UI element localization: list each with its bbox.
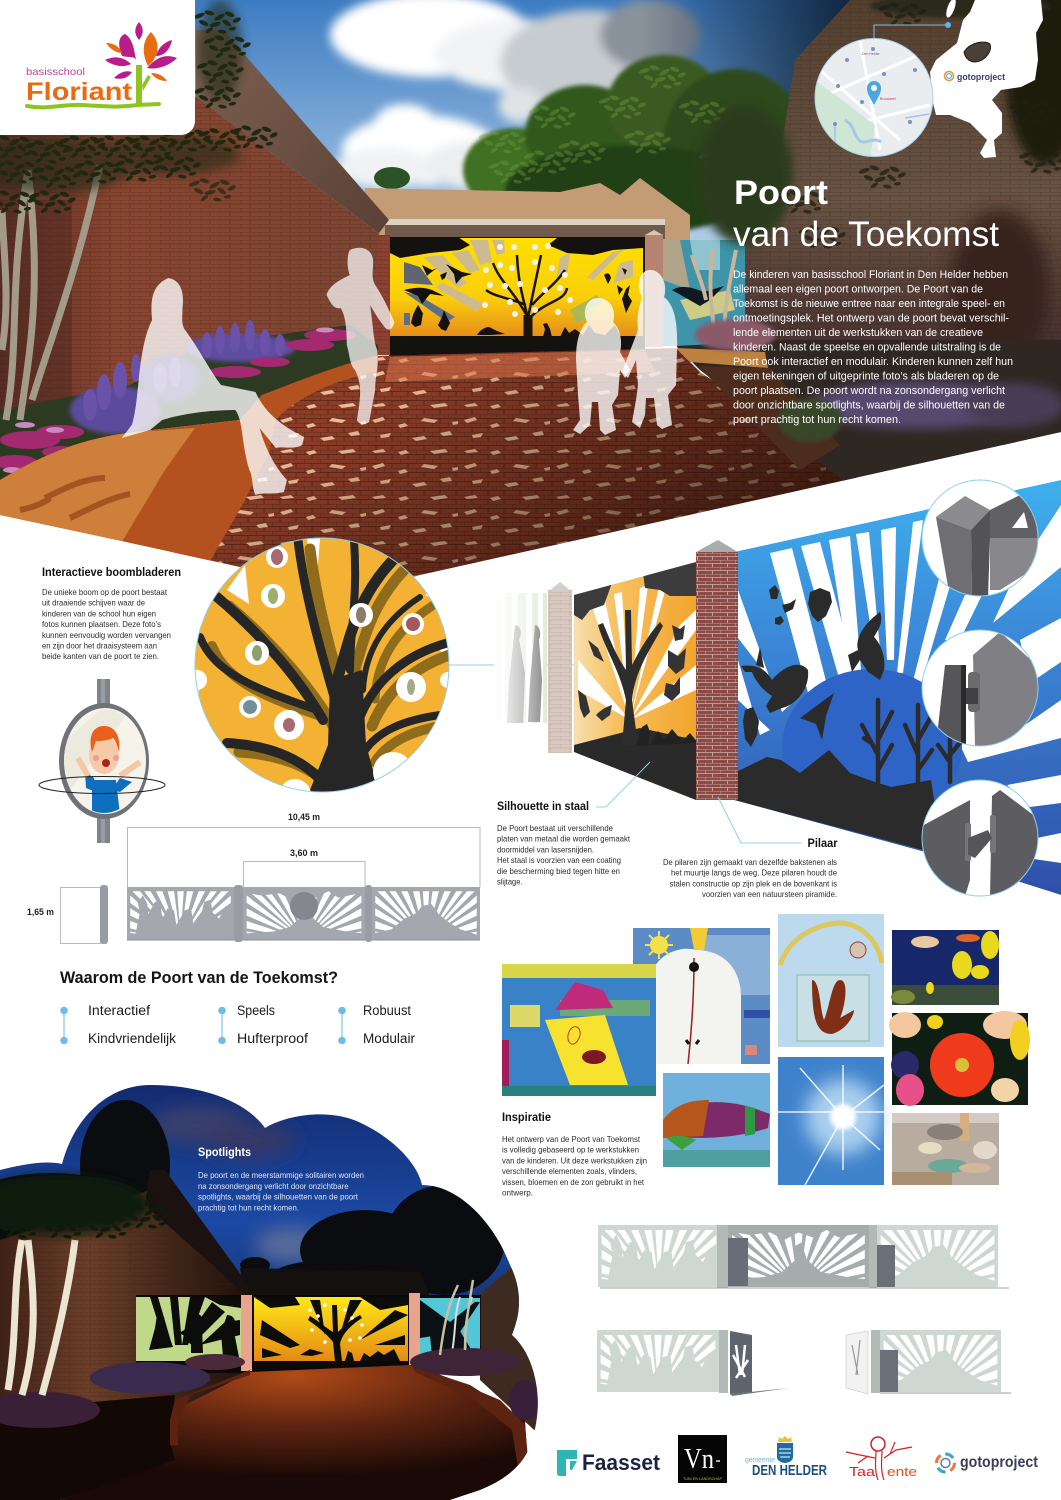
title: Poort — [734, 174, 828, 212]
text: Inspiratie: is volledig gebaseerd op te werkstukken — [502, 1145, 639, 1155]
bullet pair: Speels / Hufterproof: Speels — [237, 1003, 275, 1018]
far left faded gate panel — [494, 590, 550, 725]
logo: Faasset: Faasset — [582, 1450, 661, 1475]
roof eave — [196, 30, 389, 233]
text: Inspiratie: Het ontwerp van de Poort van Toekomst — [502, 1134, 641, 1144]
heading: Pilaar: Pilaar — [808, 838, 838, 850]
night right panel — [420, 1297, 480, 1360]
photo: sun in sky — [778, 1057, 884, 1185]
logo: gemeente Den Helder — [745, 1436, 827, 1479]
logo: gemeente Den Helder: DEN HELDER — [752, 1462, 827, 1479]
text: Spotlights — [198, 1170, 364, 1212]
intro text: poort prachtig tot hun recht komen. — [733, 414, 901, 426]
text: Silhouette in staal: platen van metaal die worden gemaakt — [497, 834, 631, 844]
text: Spotlights: spotlights, waarbij de silhouetten van de poort — [198, 1192, 359, 1202]
text: Silhouette in staal: doormiddel van lasersnijden. — [497, 844, 594, 854]
bullet pair: Interactief / Kindvriendelijk — [60, 1003, 176, 1046]
dimension label: 1,65 m: 1,65 m — [27, 907, 54, 917]
text: Interactieve boombladeren: De unieke boom op de poort bestaat — [42, 587, 168, 597]
callout line: pilaar — [718, 797, 801, 843]
heading: Waarom de Poort van de Toekomst?: Waarom de Poort van de Toekomst? — [60, 969, 338, 987]
tree trunks in front of right panel — [692, 250, 736, 340]
logo card: basisschool Floriant — [0, 0, 195, 135]
gate render: front elevation — [598, 1225, 1009, 1288]
logo green wave — [27, 104, 159, 107]
callout line: silhouette — [596, 762, 650, 807]
text: Silhouette in staal: die bescherming bied tegen hitte en — [497, 866, 620, 876]
text: Interactieve boombladeren: kunnen eenvoudig worden vervangen — [42, 630, 171, 640]
text: Interactieve boombladeren: en zijn door het draaisysteem aan — [42, 640, 157, 650]
text: Inspiratie: verschillende elementen zoals, vlinders, — [502, 1166, 637, 1176]
right planter and flowers — [676, 319, 1061, 482]
text: Spotlights: De poort en de meerstammige solitairen worden — [198, 1170, 364, 1180]
detail circle: gate centre hinge — [922, 780, 1040, 896]
intro text: allemaal een eigen poort ontworpen. De Poort van de — [733, 284, 983, 296]
logo: gotoproject: gotoproject — [960, 1454, 1039, 1471]
text: Spotlights: na zonsondergang verlicht door onzichtbare — [198, 1181, 349, 1191]
night eave — [145, 1170, 252, 1294]
near brick pillar — [696, 540, 738, 800]
text: Silhouette in staal — [497, 823, 631, 886]
night pillars — [241, 1293, 420, 1371]
dimension label: 3,60 m: 3,60 m — [290, 848, 318, 858]
logo: Taalente: Taa — [849, 1464, 876, 1479]
location dot — [945, 22, 951, 28]
logo flower — [105, 22, 177, 103]
title — [733, 174, 999, 254]
silhouette: two children holding hands — [573, 270, 677, 435]
text: Inspiratie — [502, 1134, 647, 1198]
night planters and flowers — [0, 1348, 541, 1500]
flower beds — [0, 320, 378, 480]
connector line from tree to gate — [449, 664, 617, 666]
heading: Spotlights: Spotlights — [198, 1147, 251, 1159]
gate render: open left — [597, 1330, 790, 1396]
left faded pillar — [548, 582, 572, 753]
fence elevation with dimensions — [60, 828, 480, 944]
logo: gotoproject — [936, 1454, 1039, 1472]
night right wall — [479, 1268, 538, 1430]
text: Interactieve boombladeren: uit draaiende schijven waar de — [42, 598, 145, 608]
bullet pair: Robuust / Modulair: Modulair — [363, 1031, 415, 1046]
child drawing: fish — [663, 1073, 770, 1167]
night gate base — [136, 1295, 481, 1373]
night birch trees — [0, 1175, 473, 1395]
night left panel — [136, 1297, 241, 1361]
heading: Interactieve boombladeren: Interactieve boombladeren — [42, 567, 181, 579]
logo: Vn tuin en landschap: Vn — [684, 1444, 714, 1475]
night paving — [60, 1365, 530, 1500]
steel gate in perspective — [494, 480, 1061, 895]
logo: gemeente Den Helder: gemeente — [745, 1457, 775, 1464]
text: Pilaar: het muurtje langs de weg. Deze pilaren houdt de — [671, 868, 837, 878]
corten steel bench — [0, 355, 378, 570]
text: Silhouette in staal: slijtage. — [497, 876, 522, 886]
right gate panel — [663, 240, 753, 346]
text: Interactieve boombladeren: kinderen van de school hun eigen — [42, 608, 156, 618]
text: Silhouette in staal: De Poort bestaat uit verschillende — [497, 823, 613, 833]
location map circle: Den Helder — [862, 52, 881, 56]
detail circle: tree leaves — [194, 538, 450, 792]
title: van de Toekomst — [733, 215, 999, 254]
detail circle: gate hinge — [922, 630, 1040, 746]
intro text: De kinderen van basisschool Floriant in Den Helder hebben — [733, 269, 1008, 281]
map pin — [867, 81, 881, 105]
intro text — [733, 269, 1013, 426]
night clouds — [150, 1107, 325, 1263]
intro text: Toekomst is de nieuwe entree naar een integrale speel- en — [733, 298, 1005, 310]
silhouette: running child — [327, 248, 394, 424]
sky — [195, 0, 850, 240]
rotating disc illustration — [39, 679, 165, 843]
logo wordmark basisschool: basisschool — [26, 66, 85, 78]
clouds — [330, 0, 700, 189]
heading: Inspiratie: Inspiratie — [502, 1112, 551, 1124]
photo: flowers — [889, 1011, 1030, 1106]
orange tree panel — [574, 560, 698, 805]
intro text: eigen tekeningen of uitgeprinte foto’s als bladeren op de — [733, 370, 999, 382]
brick paving — [174, 348, 857, 577]
bullet pair: Interactief / Kindvriendelijk: Interactief — [88, 1003, 150, 1018]
gate render: open right — [846, 1330, 1011, 1394]
sea silhouettes — [734, 585, 936, 852]
right brick wall — [697, 0, 1061, 445]
child drawing: house — [502, 964, 656, 1096]
night left wall — [0, 1190, 250, 1420]
logo wordmark Floriant: Floriant — [26, 78, 133, 106]
night center panel — [254, 1297, 408, 1371]
left gate panel — [198, 235, 372, 342]
detail circle: pillar cap — [922, 480, 1040, 598]
text: Pilaar — [663, 857, 837, 899]
logo: Vn tuin en landschap — [678, 1435, 727, 1483]
foreground birch tree — [0, 0, 279, 420]
bullet pair: Robuust / Modulair: Robuust — [363, 1003, 411, 1018]
logo: Vn tuin en landschap: TUIN EN LANDSCHAP — [683, 1477, 723, 1481]
child drawing: rainbow arch — [778, 914, 884, 1047]
text: Silhouette in staal: Het staal is voorzien van een coating — [497, 855, 621, 865]
intro text: kinderen. Naast de speelse en opvallende uitstraling is de — [733, 342, 1001, 354]
text: Inspiratie: ontwerp. — [502, 1188, 533, 1198]
text: Pilaar: voorzien van een natuursteen piramide. — [702, 889, 837, 899]
bullet pair: Robuust / Modulair — [338, 1003, 415, 1046]
intro text: ontmoetingsplek. Het ontwerp van de poort bevat verschil- — [733, 312, 1009, 324]
photo: clay fish — [892, 1113, 999, 1185]
intro text: lende elementen uit de werkstukken van de creatieve — [733, 327, 983, 339]
photo: tropical fish — [891, 930, 999, 1005]
gate pillars — [370, 230, 663, 355]
child drawing: white figure on blue — [633, 928, 770, 1064]
intro text: Poort ook interactief en modulair. Kinderen kunnen zelf hun — [733, 356, 1013, 368]
night roof — [240, 1268, 430, 1296]
text: Interactieve boombladeren — [42, 587, 171, 661]
night sky — [0, 1080, 545, 1320]
gotoproject logo on map: gotoproject — [957, 72, 1006, 83]
silhouette: seated woman — [122, 278, 304, 495]
blue rays and ocean panel — [734, 480, 1061, 895]
text: Inspiratie: vissen, bloemen en de zon gebruikt in het — [502, 1177, 645, 1187]
hero photo: courtyard with gate — [0, 0, 1061, 592]
night tree silhouettes — [0, 1100, 505, 1296]
intro text: poort plaatsen. De poort wordt na zonsondergang verlicht — [733, 385, 1006, 397]
intro text: door onzichtbare spotlights, waarbij de silhouetten van de — [733, 400, 1005, 412]
logo: Taalente — [846, 1437, 917, 1480]
left brick wall — [0, 97, 379, 410]
location map circle: Broodzeel — [880, 97, 896, 101]
text: Pilaar: stalen constructie op zijn plek en de bovenkant is — [670, 878, 837, 888]
dimension label: 10,45 m: 10,45 m — [288, 812, 320, 822]
text: Interactieve boombladeren: fotos kunnen plaatsen. Deze foto’s — [42, 619, 161, 629]
location map circle — [814, 38, 934, 157]
logo: Taalente: ente — [887, 1464, 917, 1479]
bullet pair: Interactief / Kindvriendelijk: Kindvriendelijk — [88, 1031, 176, 1046]
center gate panel — [389, 237, 645, 357]
connector line to location — [874, 25, 948, 38]
text: Spotlights: prachtig tot hun recht komen. — [198, 1202, 299, 1212]
text: Inspiratie: van de kinderen. Uit deze werkstukken zijn — [502, 1155, 647, 1165]
text: Interactieve boombladeren: beide kanten van de poort te zien. — [42, 651, 159, 661]
night scene in cloud shape — [0, 1080, 545, 1500]
text: Pilaar: De pilaren zijn gemaakt van dezelfde bakstenen als — [663, 857, 837, 867]
heading: Silhouette in staal: Silhouette in staal — [497, 801, 589, 813]
bullet pair: Speels / Hufterproof — [218, 1003, 308, 1046]
dark sky right — [655, 0, 850, 99]
back building — [360, 178, 690, 240]
map of the Netherlands — [930, 0, 1043, 158]
bullet pair: Speels / Hufterproof: Hufterproof — [237, 1031, 308, 1046]
back trees — [374, 55, 807, 235]
